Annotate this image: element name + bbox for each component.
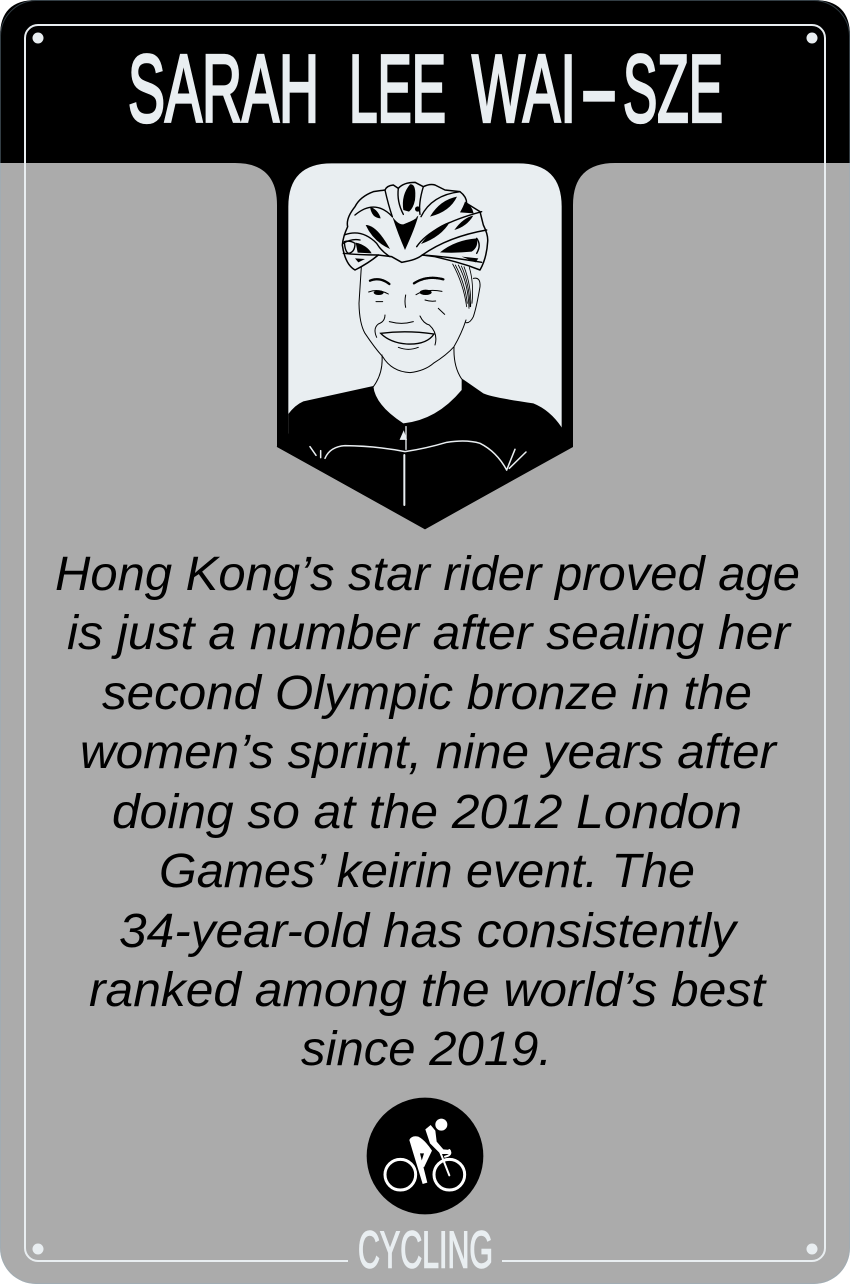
cycling label: CYCLING xyxy=(358,1222,493,1280)
helmet vents xyxy=(355,184,478,262)
description text: doing so at the 2012 London xyxy=(112,786,742,839)
title: - xyxy=(580,36,618,142)
title: SARAH xyxy=(128,36,319,142)
portrait of Sarah Lee Wai-Sze xyxy=(277,163,573,529)
icon: cyclist in black circle xyxy=(367,1098,483,1214)
title: SZE xyxy=(623,36,723,142)
description text xyxy=(55,548,800,1076)
title: WAI xyxy=(472,36,576,142)
description text: women’s sprint, nine years after xyxy=(80,726,778,779)
description text: is just a number after sealing her xyxy=(67,607,792,660)
description text: ranked among the world’s best xyxy=(89,964,767,1017)
description text: second Olympic bronze in the xyxy=(102,667,752,720)
jersey seams and zipper xyxy=(310,427,526,505)
jersey xyxy=(277,378,573,529)
description text: Games’ keirin event. The xyxy=(159,845,695,898)
cycling label xyxy=(348,1222,502,1280)
helmet xyxy=(342,182,488,270)
eyes xyxy=(374,290,432,295)
helmet ridges xyxy=(343,187,487,262)
description text: Hong Kong’s star rider proved age xyxy=(55,548,800,601)
face and neck outline xyxy=(359,264,480,387)
panel: black header with portrait shield xyxy=(0,0,850,529)
portrait background panel xyxy=(288,163,562,437)
smile xyxy=(381,332,434,344)
description text: since 2019. xyxy=(301,1023,552,1076)
helmet shell xyxy=(342,182,488,270)
title: LEE xyxy=(349,36,446,142)
description text: 34-year-old has consistently xyxy=(119,905,739,958)
